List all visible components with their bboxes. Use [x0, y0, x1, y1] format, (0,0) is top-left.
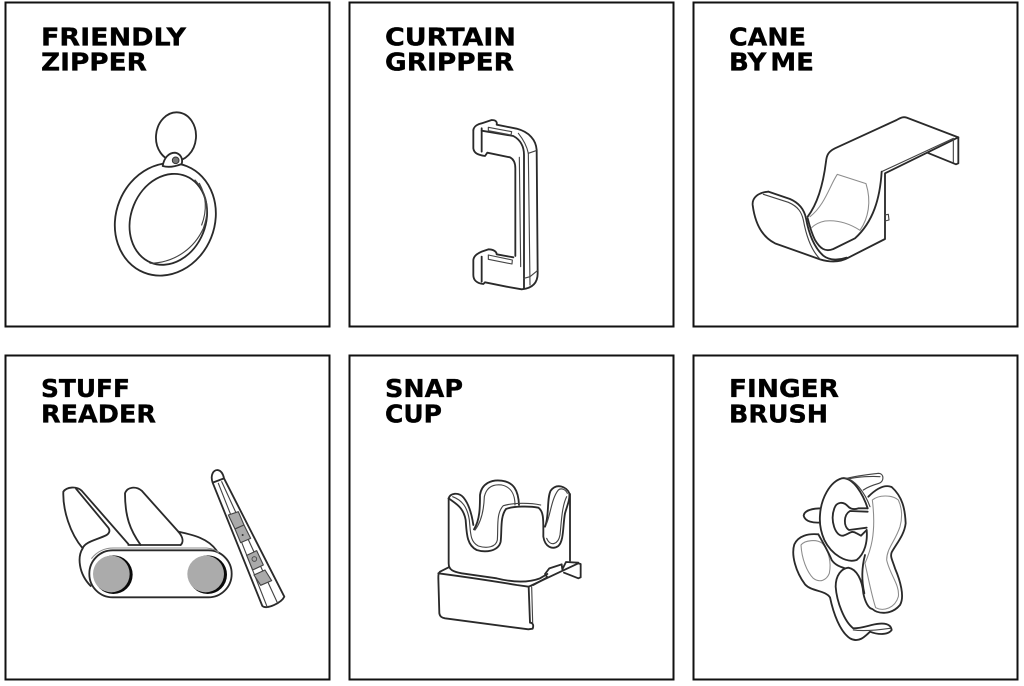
- heading: stuff reader: STUFF: [41, 374, 130, 403]
- panel: curtain gripper: [350, 2, 674, 326]
- heading: snap cup: CUP: [385, 400, 442, 428]
- icon: curtain gripper: [473, 120, 538, 289]
- heading: curtain gripper: GRIPPER: [385, 48, 514, 76]
- heading: friendly zipper: [41, 22, 187, 76]
- heading: cane by me: BY ME: [729, 48, 814, 76]
- icon: speakers and pen: [63, 470, 284, 607]
- panel: friendly zipper: [6, 2, 330, 326]
- heading: curtain gripper: [385, 22, 516, 76]
- heading: stuff reader: READER: [41, 400, 156, 428]
- heading: curtain gripper: CURTAIN: [385, 22, 516, 52]
- icon: snap cup holder: [438, 480, 581, 629]
- heading: finger brush: BRUSH: [729, 400, 828, 428]
- heading: snap cup: SNAP: [385, 374, 463, 403]
- icon: ring with tab: [98, 111, 233, 291]
- panel: stuff reader: [6, 356, 330, 680]
- heading: friendly zipper: FRIENDLY: [41, 22, 187, 52]
- heading: cane by me: CANE: [729, 22, 806, 52]
- panel: cane by me: [694, 2, 1018, 326]
- heading: stuff reader: [41, 374, 156, 428]
- heading: finger brush: FINGER: [729, 374, 839, 403]
- heading: friendly zipper: ZIPPER: [41, 48, 147, 76]
- heading: snap cup: [385, 374, 463, 428]
- icon: cane holder: [753, 117, 958, 261]
- heading: finger brush: [729, 374, 839, 428]
- panel: snap cup: [350, 356, 674, 680]
- panel: finger brush: [694, 356, 1018, 680]
- heading: cane by me: [729, 22, 814, 76]
- icon: finger brush: [793, 473, 906, 640]
